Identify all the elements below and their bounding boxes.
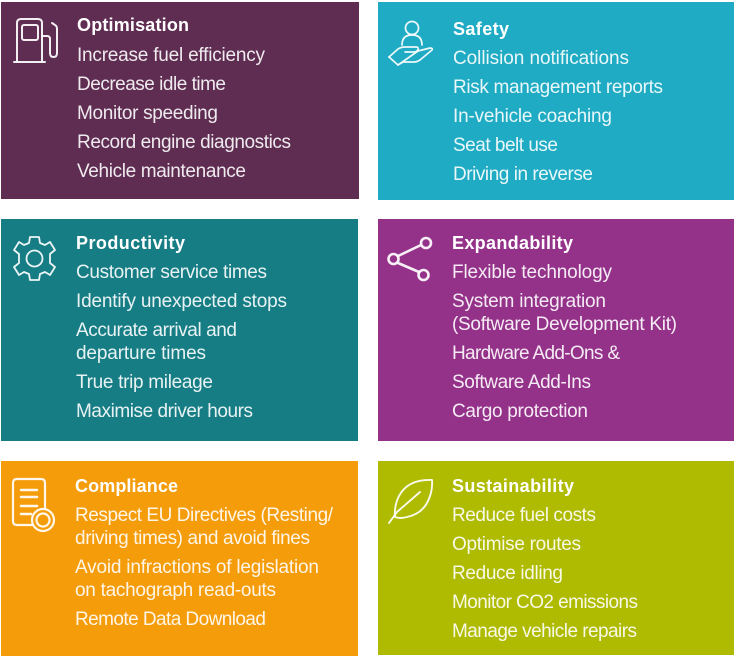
- list: productivity items: Customer service times: [76, 262, 267, 283]
- list: safety items: Risk management reports: [453, 77, 663, 98]
- icon: certified document: [13, 479, 54, 531]
- list: compliance items: Avoid infractions of legislation: [75, 557, 319, 578]
- list: optimisation items: Monitor speeding: [77, 103, 218, 124]
- list: expandability items: [452, 262, 677, 422]
- list: compliance items: driving times) and avoid fines: [75, 528, 310, 549]
- list: compliance items: on tachograph read-outs: [75, 580, 276, 601]
- list: safety items: Collision notifications: [453, 48, 629, 69]
- panel: safety: [378, 2, 734, 200]
- list: optimisation items: Record engine diagnostics: [77, 132, 291, 153]
- list: compliance items: [75, 505, 334, 630]
- panel: sustainability: [378, 461, 734, 655]
- list: expandability items: Cargo protection: [452, 401, 588, 422]
- list: expandability items: System integration: [452, 291, 606, 312]
- list: productivity items: Accurate arrival and: [76, 320, 237, 341]
- panel: expandability: [378, 219, 734, 441]
- panel: productivity: [1, 219, 358, 441]
- list: sustainability items: Reduce idling: [452, 563, 563, 584]
- heading: productivity: Productivity: [76, 233, 185, 253]
- heading: optimisation: Optimisation: [77, 15, 189, 35]
- list: productivity items: [76, 262, 287, 422]
- list: safety items: Seat belt use: [453, 135, 558, 156]
- heading: sustainability: Sustainability: [452, 476, 574, 496]
- heading: safety: Safety: [453, 19, 509, 39]
- list: sustainability items: [452, 505, 638, 642]
- icon: fuel pump: [14, 19, 57, 62]
- list: productivity items: Identify unexpected stops: [76, 291, 287, 312]
- list: expandability items: Software Add-Ins: [452, 372, 591, 393]
- icon: leaf: [389, 480, 432, 523]
- icon: person on open hand: [389, 22, 432, 65]
- list: sustainability items: Monitor CO2 emissions: [452, 592, 638, 613]
- list: safety items: In-vehicle coaching: [453, 106, 612, 127]
- heading: expandability: Expandability: [452, 233, 573, 253]
- list: compliance items: Respect EU Directives (Resting/: [75, 505, 334, 526]
- list: optimisation items: [77, 45, 291, 182]
- list: sustainability items: Optimise routes: [452, 534, 581, 555]
- list: safety items: Driving in reverse: [453, 164, 593, 185]
- icon: gear: [14, 237, 55, 280]
- list: optimisation items: Vehicle maintenance: [77, 161, 246, 182]
- list: productivity items: Maximise driver hours: [76, 401, 253, 422]
- list: expandability items: (Software Development Kit): [452, 314, 677, 335]
- heading: compliance: Compliance: [75, 476, 178, 496]
- list: optimisation items: Increase fuel efficiency: [77, 45, 266, 66]
- panel: compliance: [1, 461, 358, 656]
- list: expandability items: Hardware Add-Ons &: [452, 343, 620, 364]
- icon: share nodes: [388, 238, 431, 280]
- list: productivity items: departure times: [76, 343, 206, 364]
- list: compliance items: Remote Data Download: [75, 609, 266, 630]
- list: sustainability items: Reduce fuel costs: [452, 505, 596, 526]
- list: productivity items: True trip mileage: [76, 372, 213, 393]
- list: sustainability items: Manage vehicle repairs: [452, 621, 637, 642]
- list: expandability items: Flexible technology: [452, 262, 612, 283]
- list: optimisation items: Decrease idle time: [77, 74, 226, 95]
- list: safety items: [453, 48, 663, 185]
- panel: optimisation: [1, 2, 359, 199]
